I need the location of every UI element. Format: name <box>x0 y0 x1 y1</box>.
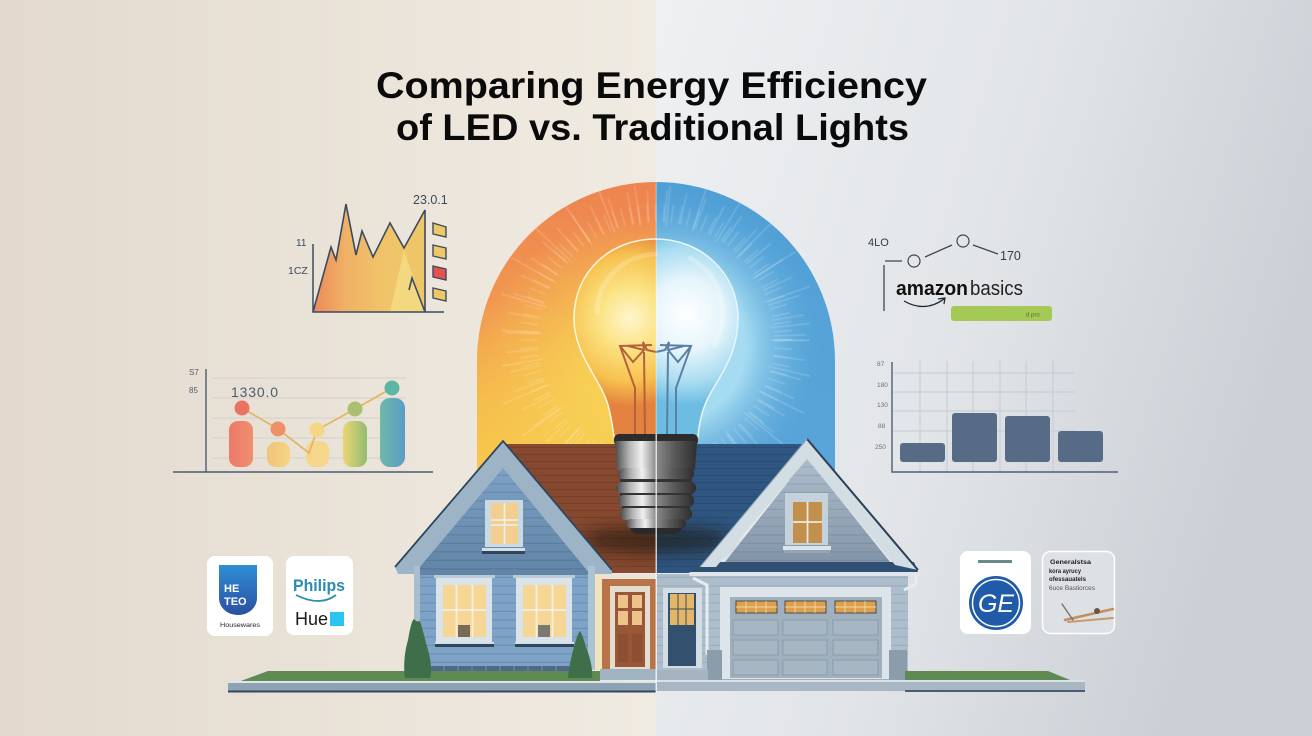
gable window <box>783 493 831 553</box>
panel: glowing arch behind bulb <box>470 180 842 480</box>
chart labels <box>288 193 448 277</box>
ground floor wall <box>656 574 908 680</box>
bars <box>900 413 1103 462</box>
trend dots <box>234 380 400 438</box>
shrub: right <box>568 631 592 678</box>
lower right window <box>513 575 575 647</box>
axes <box>892 362 1118 472</box>
card caption: Housewares <box>220 623 260 629</box>
labels <box>868 237 1021 263</box>
gable wall <box>725 458 890 562</box>
logo: amazon basics: basics <box>970 278 1023 300</box>
gable shading <box>414 465 590 575</box>
background: cool right half <box>656 0 1312 736</box>
lower left window <box>434 575 495 647</box>
card text: Generalstsa <box>1050 559 1091 566</box>
grid <box>893 361 1075 472</box>
title <box>376 65 927 148</box>
trend line <box>242 388 392 453</box>
entry door <box>663 588 702 668</box>
axis labels: 88 <box>878 423 886 430</box>
chart labels: S7 <box>189 368 199 377</box>
chart labels: 11 <box>296 238 307 249</box>
shrub: left <box>404 619 431 678</box>
labels: 4LO <box>868 237 889 249</box>
logo card: Philips Hue <box>286 556 353 635</box>
wall left <box>414 465 590 666</box>
green progress bar: d pro <box>1026 312 1040 318</box>
ground lawn and walkway <box>228 671 1085 692</box>
bulb highlights <box>597 254 723 345</box>
logo: amazon basics <box>896 278 1023 307</box>
green progress bar <box>951 306 1052 321</box>
axis labels: 87 <box>877 361 885 368</box>
house: right (traditional side) <box>656 439 922 680</box>
title: Comparing Energy Efficiency <box>376 65 927 106</box>
area chart: top left <box>288 193 448 312</box>
bar chart: right <box>875 361 1118 472</box>
smile arc <box>296 595 336 601</box>
chart labels: 1CZ <box>288 265 308 277</box>
card text <box>1049 559 1096 592</box>
gable trim <box>700 439 918 570</box>
GE circle <box>969 576 1023 630</box>
axis labels: 130 <box>877 402 888 409</box>
chart labels <box>189 368 278 400</box>
logo card: shield brand <box>207 556 273 636</box>
chart labels: 85 <box>189 386 198 395</box>
card text: kora ayrucy <box>1049 568 1081 575</box>
bulb glass warm half <box>573 238 656 438</box>
chart labels: 1330.0 <box>231 384 278 400</box>
hue square <box>330 612 344 626</box>
background: warm left half <box>0 0 656 736</box>
gutter <box>689 572 922 655</box>
foundation <box>430 666 570 678</box>
card text: 6uce Bastiorces <box>1049 585 1096 592</box>
shield text: TEO <box>224 596 247 608</box>
screw base <box>614 434 698 534</box>
shield text: HE <box>224 583 239 595</box>
axes <box>313 244 444 312</box>
pill bars <box>229 398 405 467</box>
roof: brown left <box>505 444 656 573</box>
stone pillars <box>707 650 907 680</box>
line diagram: top right <box>868 235 1021 311</box>
logo card: text and tool <box>1042 552 1114 634</box>
color strip <box>978 560 1012 563</box>
house: left (LED side) <box>395 441 656 680</box>
dark eave roof strip <box>690 562 918 572</box>
filament <box>620 342 691 435</box>
logo card: Philips Hue: Hue <box>295 609 328 629</box>
title: of LED vs. Traditional Lights <box>396 107 909 148</box>
gable trim <box>395 441 612 670</box>
axis labels <box>875 361 888 451</box>
shield <box>219 565 257 615</box>
inner lighter wedge <box>390 250 425 312</box>
chart labels: 23.0.1 <box>413 193 448 207</box>
center divider line <box>656 182 657 693</box>
axis labels: 180 <box>877 382 888 389</box>
area outline <box>313 204 425 312</box>
steps <box>600 669 656 680</box>
gable shading <box>725 458 890 562</box>
shield text <box>224 583 247 608</box>
legend swatches <box>433 223 446 301</box>
entry porch and door <box>595 574 656 670</box>
nodes <box>908 235 969 267</box>
axis labels: 250 <box>875 444 886 451</box>
labels: 170 <box>1000 249 1021 263</box>
logo card: Philips Hue: Philips <box>293 576 345 595</box>
logo card: GE: GE <box>978 590 1014 618</box>
garage windows <box>736 601 876 613</box>
bulb shadow on roof <box>581 527 731 553</box>
roof: navy right <box>656 444 806 573</box>
gable window <box>482 500 525 554</box>
logo card: GE <box>960 551 1031 634</box>
tool icon <box>1062 604 1113 622</box>
card text: ofessauatels <box>1049 576 1086 583</box>
axes <box>173 369 433 472</box>
steps <box>656 670 708 680</box>
logo: amazon basics: amazon <box>896 278 968 300</box>
bar and line chart: left <box>173 368 433 472</box>
area fill <box>313 204 425 312</box>
garage <box>720 587 891 679</box>
garage panels <box>733 620 878 675</box>
grid lines <box>212 378 406 458</box>
icon: light bulb <box>574 239 738 534</box>
bulb glass cool half <box>656 238 739 438</box>
